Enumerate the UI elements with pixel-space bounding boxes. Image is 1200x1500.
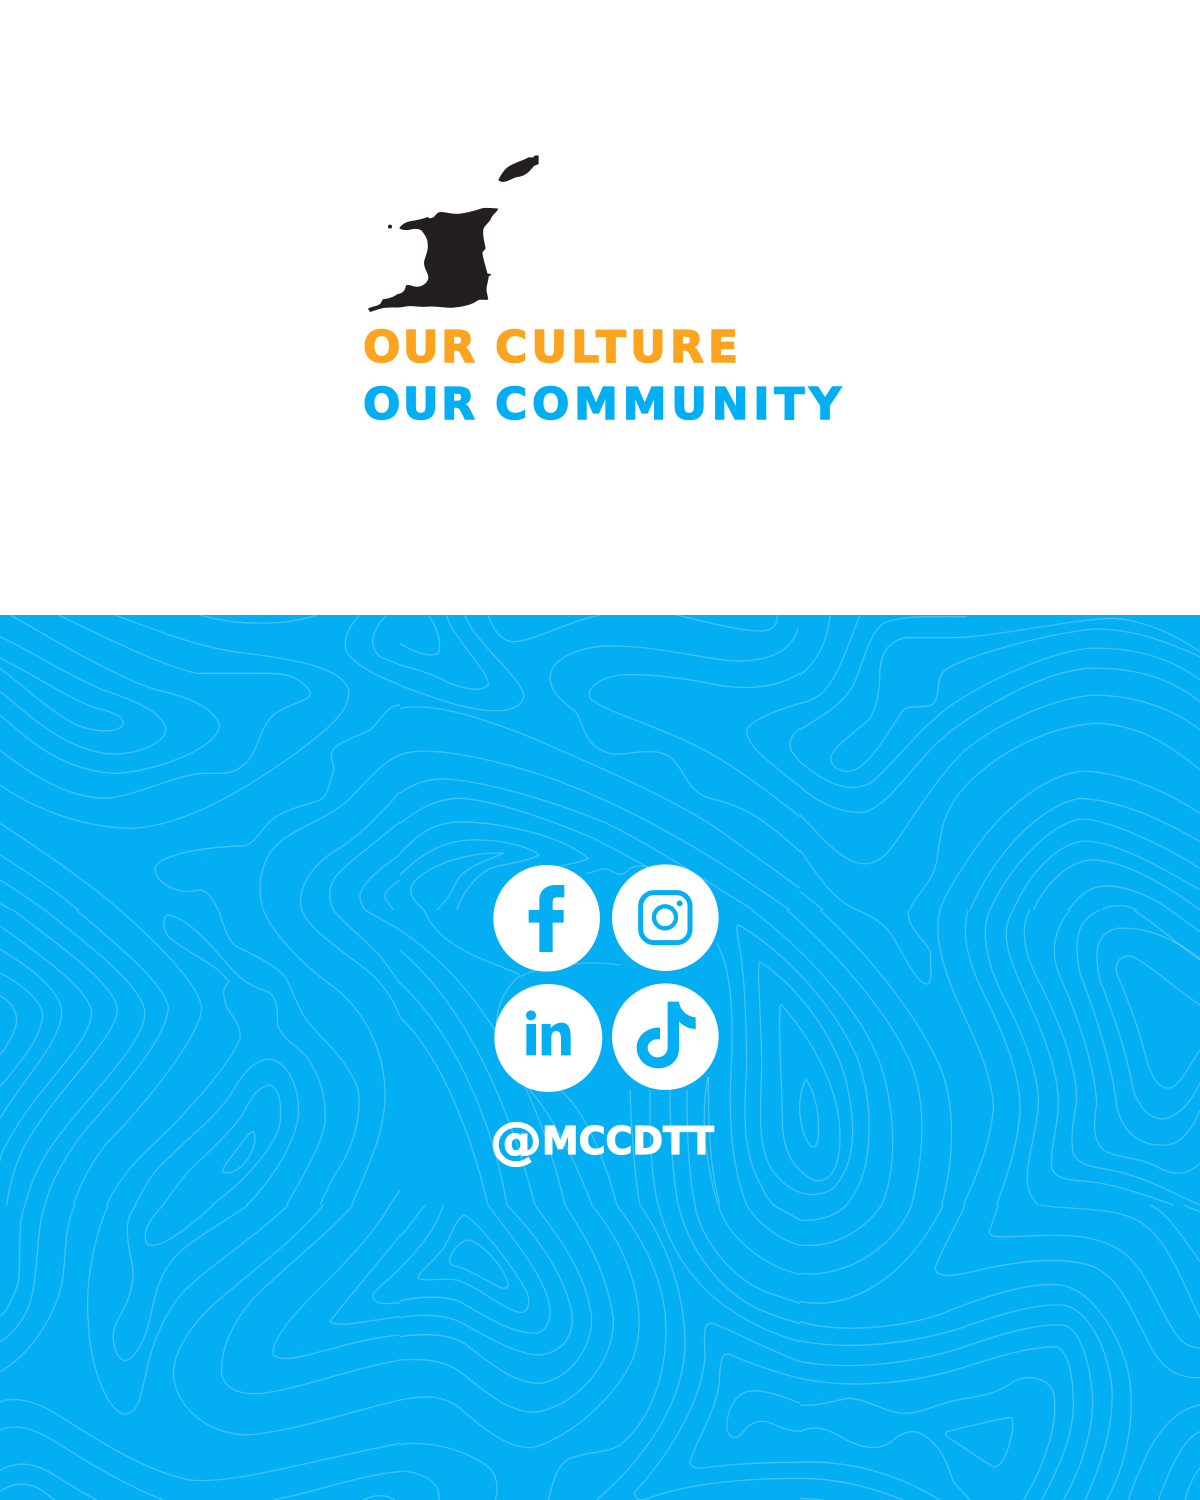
- heading: our culture: [363, 322, 738, 373]
- icon: facebook: [493, 865, 600, 972]
- heading: our community: OUR: [363, 379, 475, 430]
- icon: linkedin: [494, 984, 602, 1092]
- icon: map of Trinidad and Tobago: [368, 155, 539, 312]
- heading: our culture: OUR: [363, 322, 475, 373]
- icon: tiktok: [612, 983, 719, 1090]
- text: social handle: MCCDTT: [542, 1119, 715, 1164]
- heading: our culture: CULTURE: [495, 322, 738, 373]
- text: social handle: @: [490, 1112, 542, 1170]
- icon: instagram: [612, 864, 719, 971]
- heading: our community: COMMUNITY: [495, 379, 842, 430]
- text: social handle: [490, 1112, 715, 1170]
- panel: blue contour background: [0, 615, 1200, 1500]
